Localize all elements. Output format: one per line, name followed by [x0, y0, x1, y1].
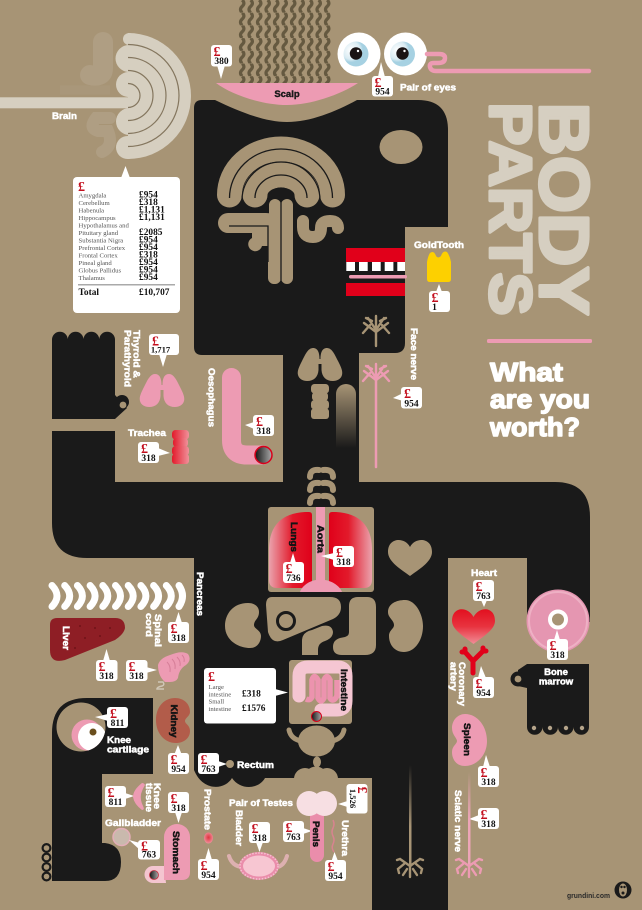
- label: lungs: Lungs: [288, 522, 299, 552]
- icon: hair: [238, 0, 331, 83]
- label: kidney: Kidney: [168, 704, 179, 738]
- price: gold tooth: 1: [432, 303, 437, 313]
- price: oesophagus: £: [256, 415, 263, 430]
- big intestine price box: £1576: [242, 704, 266, 714]
- icon: black-side face nerve: [363, 316, 389, 346]
- brain price table: £318: [139, 198, 158, 208]
- price: scalp: 380: [214, 57, 229, 67]
- icon: pink face nerve: [363, 364, 389, 467]
- price: bladder: [249, 822, 270, 852]
- label: gallbladder: Gallbladder: [105, 818, 161, 829]
- label: pair of testes: Pair of Testes: [229, 798, 293, 809]
- price: penis: £: [286, 821, 292, 836]
- tan lower panel: [265, 778, 372, 910]
- brain price table: Hypothalamus and: [78, 222, 129, 230]
- icon: heart: [452, 609, 495, 644]
- icon: knee cartilage: [72, 720, 106, 751]
- price: aorta: [321, 546, 354, 568]
- label: trachea: Trachea: [128, 428, 167, 439]
- price: bone marrow: £: [550, 639, 556, 654]
- price: prostate: £: [200, 859, 208, 874]
- price: knee tissue: [105, 786, 134, 808]
- credit: grundini.com: grundini.com: [567, 891, 610, 900]
- price: spinal cord upper: 318: [171, 634, 186, 644]
- subtitle: what are you worth: worth?: [489, 412, 580, 442]
- price: lungs: £: [286, 562, 292, 577]
- icon: pink sciatic nerve: [456, 772, 482, 877]
- figure body silhouette: [52, 100, 590, 910]
- scalp: [216, 83, 358, 105]
- price: spleen: 318: [481, 778, 496, 788]
- label: knee cartilage: [107, 735, 149, 756]
- price: liver: 318: [99, 672, 114, 682]
- label: knee tissue: [143, 783, 162, 812]
- brain price table: Prefrontal Cortex: [78, 245, 126, 252]
- label: knee cartilage: Knee: [107, 735, 131, 746]
- icon: teeth: [346, 248, 407, 296]
- title: body parts: [477, 102, 603, 316]
- label: pair of eyes: Pair of eyes: [400, 82, 456, 94]
- price: sciatic nerve: [469, 808, 499, 830]
- icon: pink thyroid: [140, 374, 184, 407]
- brain price table: Pineal gland: [78, 260, 112, 267]
- figure left leg: [42, 698, 153, 882]
- label: thyroid and parathyroid: [122, 330, 142, 387]
- price: lungs: [283, 553, 304, 584]
- price: gallbladder: 763: [142, 850, 156, 860]
- brain price table: Thalamus: [78, 275, 105, 282]
- scalp: Scalp: [274, 89, 300, 100]
- price: sciatic nerve: £: [480, 808, 488, 823]
- price: knee cartilage: £: [110, 707, 117, 722]
- price: sciatic nerve: 318: [481, 820, 496, 830]
- label: liver: Liver: [60, 626, 71, 650]
- price: spleen: [478, 755, 499, 788]
- title: body parts: PARTS: [477, 102, 543, 316]
- brain price table: £954: [139, 236, 158, 246]
- price: penis: 763: [286, 833, 301, 843]
- price: spinal cord upper: £: [170, 622, 178, 637]
- brain price table: Total: [78, 288, 99, 298]
- price: face nerve: [393, 387, 422, 410]
- price: aorta: £: [336, 546, 343, 561]
- icon: liver: [50, 618, 125, 661]
- icon: spinal cord organ: [157, 652, 190, 689]
- brain price table: £954: [139, 190, 158, 200]
- price: liver: [96, 649, 118, 682]
- icon: left lung: [269, 512, 312, 588]
- price: gold tooth: [429, 284, 450, 313]
- price: face nerve: 954: [404, 400, 419, 410]
- label: brain: Brain: [52, 111, 77, 122]
- price: prostate: [198, 848, 219, 881]
- price: stomach: £: [170, 792, 178, 807]
- tan organs: [225, 597, 423, 655]
- icon: bone marrow: [526, 590, 590, 652]
- icon: spinal cord vertebrae: [52, 586, 182, 606]
- tan vertebrae: [310, 470, 333, 503]
- price: eyes: 954: [375, 88, 390, 98]
- subtitle: what are you worth: What: [490, 357, 563, 387]
- label: coronary artery: artery: [448, 662, 458, 692]
- icon: small intestine: [306, 676, 337, 701]
- icon: knee tissue: [133, 783, 145, 810]
- price: coronary artery: £: [476, 677, 482, 692]
- brain price table: £318: [139, 250, 158, 260]
- price: face nerve: £: [404, 387, 411, 402]
- icon: brain: [0, 33, 191, 159]
- price: trachea: [138, 442, 170, 464]
- brain price table: Cerebellum: [78, 200, 110, 207]
- price: penis: [283, 821, 312, 843]
- figure right hand: [510, 664, 589, 735]
- brain price table: Hippocampus: [78, 215, 116, 222]
- price: knee cartilage: [95, 707, 128, 729]
- price: aorta: 318: [336, 558, 351, 568]
- price: bladder: 318: [252, 834, 267, 844]
- price: testes: £: [354, 786, 369, 794]
- icon: coronary artery: [462, 648, 486, 673]
- brain price table: £954: [139, 273, 158, 283]
- price: spinal cord lower: £: [128, 660, 136, 675]
- price: testes: 1,526: [348, 789, 358, 809]
- label: prostate: Prostate: [202, 789, 212, 830]
- label: coronary artery: [448, 662, 467, 707]
- price: spinal cord lower: [126, 660, 157, 682]
- price: heart: [473, 580, 494, 607]
- price: rectum: 763: [201, 765, 216, 775]
- label: knee tissue: tissue: [143, 783, 154, 812]
- price: thyroid: 1,717: [151, 344, 171, 354]
- big intestine price box: £: [208, 670, 215, 685]
- icon: gold tooth: [427, 252, 451, 282]
- price: bone marrow: 318: [550, 651, 565, 661]
- label: rectum: Rectum: [237, 760, 274, 771]
- brain price table: Habenula: [78, 208, 104, 214]
- label: bone marrow: [539, 667, 574, 688]
- label: urethra: Urethra: [339, 820, 350, 857]
- price: spleen: £: [480, 766, 488, 781]
- brain price table: £1,131: [139, 206, 165, 216]
- price: gold tooth: £: [432, 291, 438, 306]
- label: thyroid and parathyroid: Thyroid &: [130, 330, 142, 378]
- price: knee tissue: 811: [109, 798, 123, 808]
- big intestine price box: intestine: [208, 706, 231, 713]
- label: aorta: Aorta: [314, 525, 326, 554]
- brain price table: £954: [139, 258, 158, 268]
- label: spleen: Spleen: [461, 723, 472, 756]
- brain price table: £954: [139, 243, 158, 253]
- label: bone marrow: Bone: [544, 667, 568, 678]
- label: gold tooth: GoldTooth: [414, 240, 464, 251]
- price: spinal cord upper: [168, 612, 189, 644]
- price: eyes: [372, 62, 393, 98]
- price: prostate: 954: [201, 871, 216, 881]
- brain price table: Substantia Nigra: [78, 238, 123, 244]
- brain price table: Amygdala: [78, 192, 106, 200]
- price: coronary artery: [473, 666, 494, 699]
- price: urethra: £: [328, 860, 334, 875]
- brain price table: Frontal Cortex: [78, 252, 118, 260]
- price: scalp: £: [214, 45, 220, 60]
- price: eyes: £: [374, 76, 382, 91]
- divider bar: [487, 339, 592, 343]
- price: bone marrow: [547, 630, 568, 661]
- label: heart: Heart: [471, 568, 498, 579]
- icon: tan thyroid: [298, 348, 342, 381]
- label: intestine: Intestine: [338, 669, 349, 711]
- price: urethra: [325, 852, 346, 882]
- price: kidney: [168, 745, 189, 775]
- label: knee cartilage: cartilage: [107, 744, 149, 756]
- icon: urethra: [332, 820, 334, 852]
- icon: right lung: [329, 512, 372, 588]
- price: gallbladder: £: [141, 840, 148, 854]
- label: coronary artery: Coronary: [456, 662, 467, 707]
- tan bladder on black: [289, 726, 344, 790]
- icon: gallbladder: [113, 828, 130, 846]
- tan oesophagus fade: [336, 384, 356, 448]
- price: lungs: 736: [286, 574, 301, 584]
- brain price table: £1,131: [139, 213, 165, 223]
- big intestine price box: Large: [208, 684, 224, 691]
- icon: oesophagus: [232, 378, 272, 464]
- icon: kidney: [156, 698, 190, 743]
- ear hole: [380, 130, 422, 164]
- icon: rectum: [226, 760, 234, 768]
- price: thyroid: [149, 334, 179, 367]
- price: liver: £: [98, 660, 106, 675]
- price: urethra: 954: [328, 872, 343, 882]
- icon: testes: [296, 791, 337, 816]
- label: bone marrow: marrow: [539, 676, 574, 688]
- price: bladder: £: [252, 822, 258, 837]
- price: kidney: £: [170, 753, 178, 768]
- price: spinal cord lower: 318: [129, 672, 144, 682]
- icon: aorta: [300, 507, 342, 592]
- icon: grundini logo: [614, 882, 632, 898]
- price: rectum: £: [200, 753, 208, 768]
- panel: intestine: [289, 660, 352, 724]
- price: trachea: 318: [141, 454, 156, 464]
- subtitle: what are you worth: are you: [490, 384, 590, 414]
- price: kidney: 954: [171, 765, 186, 775]
- price: stomach: 318: [171, 804, 186, 814]
- icon: prostate: [204, 832, 213, 844]
- label: sciatic nerve: Sciatic nerve: [452, 790, 463, 852]
- ghost brain shadow: [60, 42, 110, 152]
- icon: trachea: [172, 430, 189, 464]
- big intestine price box: intestine: [208, 692, 231, 698]
- figure left hand: [52, 332, 129, 419]
- label: face nerve: Face nerve: [408, 328, 419, 380]
- price: oesophagus: [245, 415, 274, 437]
- price: gallbladder: [129, 840, 160, 860]
- icon: stomach: [144, 824, 190, 883]
- brain price table: £: [78, 180, 85, 195]
- price: testes: [338, 784, 369, 814]
- label: stomach: Stomach: [170, 831, 181, 874]
- icon: penis: [310, 812, 324, 862]
- label: oesophagus: Oesophagus: [206, 368, 216, 427]
- brain price table: £954: [139, 266, 158, 276]
- price: heart: 763: [476, 592, 491, 602]
- label: spinal cord: cord: [143, 613, 154, 637]
- price: scalp: [211, 45, 232, 79]
- title: body parts: BODY: [525, 102, 603, 316]
- icon: spleen: [452, 714, 487, 766]
- label: bladder: Bladder: [233, 810, 244, 846]
- icon: bladder: [229, 852, 287, 880]
- brain price table: Pituitary gland: [78, 230, 119, 237]
- label: penis: Penis: [310, 821, 321, 847]
- price: thyroid: £: [152, 334, 159, 350]
- subtitle: what are you worth: [489, 357, 590, 442]
- icon: pair of eyes: [338, 32, 589, 76]
- price: oesophagus: 318: [256, 427, 271, 437]
- icon: brain inside head: [218, 149, 338, 284]
- label: spinal cord: Spinal: [152, 614, 163, 647]
- price: knee cartilage: 811: [111, 719, 125, 729]
- label: spinal cord: [143, 613, 163, 647]
- label: thyroid and parathyroid: Parathyroid: [122, 330, 132, 387]
- icon: tan sciatic nerve: [397, 765, 423, 877]
- price: stomach: [168, 792, 189, 823]
- tan heart: [388, 540, 432, 576]
- price: coronary artery: 954: [476, 689, 491, 699]
- price: heart: £: [476, 580, 482, 595]
- price: trachea: £: [141, 442, 148, 457]
- brain price table: £10,707: [139, 288, 170, 298]
- price: rectum: [198, 753, 227, 775]
- icon: large intestine: [299, 667, 346, 710]
- big intestine price box: Small: [208, 698, 224, 706]
- brain price table: [73, 166, 180, 313]
- price: knee tissue: £: [108, 786, 114, 801]
- big intestine price box: £318: [242, 690, 261, 700]
- label: pancreas: Pancreas: [194, 572, 205, 616]
- label: knee tissue: Knee: [151, 783, 162, 809]
- big intestine price box: [204, 668, 288, 724]
- panel: lungs and aorta: [268, 507, 374, 592]
- brain price table: £2085: [139, 228, 163, 238]
- tan trachea: [311, 384, 329, 419]
- brain price table: Globus Pallidus: [78, 268, 121, 274]
